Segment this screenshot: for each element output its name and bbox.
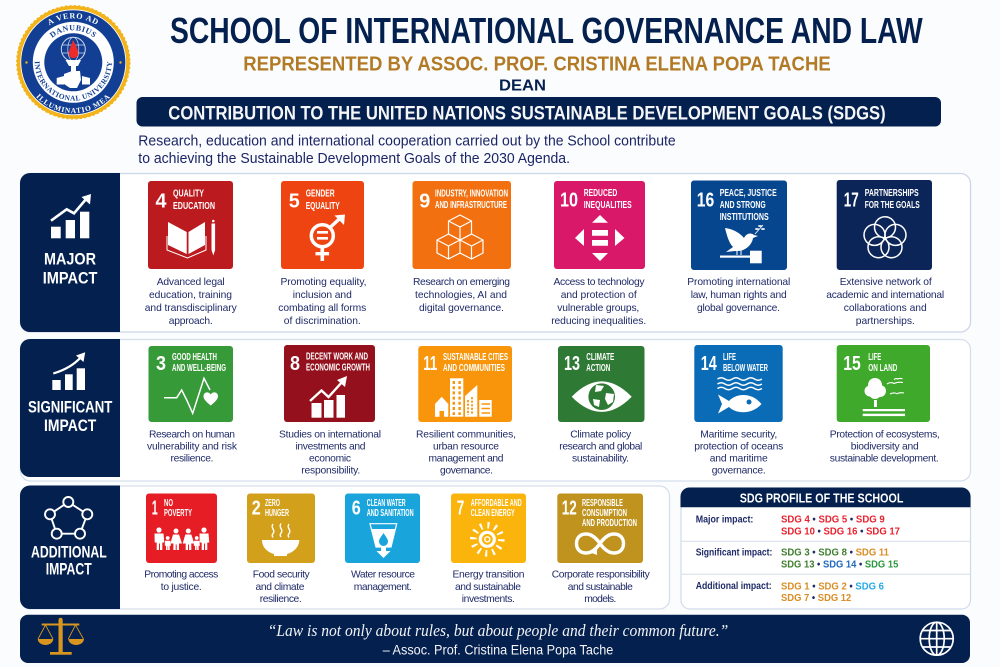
tile: SDG 16 peace justice: INSTITUTIONS [720,212,769,223]
tile: SDG 16 peace justice: PEACE, JUSTICE [720,188,777,199]
description: SDG 5: combating all forms [278,303,366,314]
description: SDG 15 [830,429,940,465]
description: SDG 5: inclusion and [293,290,352,301]
tile: SDG 5 gender equality: 5 [289,190,300,212]
tile: SDG 3 good health [148,346,233,422]
tile: SDG 12 responsible consumption: CONSUMPTION [582,508,627,519]
tile: SDG 15 life on land [837,345,930,422]
tile: SDG 1 no poverty: 1 [152,498,158,520]
row: major impact: SDG 10 • SDG 16 • SDG 17 [781,526,900,538]
tile: SDG 14 life below water: BELOW WATER [723,363,768,374]
tile: SDG 2 zero hunger [247,494,315,563]
tile: SDG 8 decent work: DECENT WORK AND [306,351,368,362]
tile: SDG 9 industry [412,181,511,269]
subtitle: representative: REPRESENTED BY ASSOC. PROF. CRISTINA ELENA POPA TACHE [243,53,831,75]
tile: SDG 12 responsible consumption: AND PRODUCTION [582,518,637,529]
tile: SDG 17 partnerships: 17 [844,190,859,212]
tile: SDG 16 peace justice: AND STRONG [720,200,766,211]
icon: growth chart [310,376,347,418]
row: significant impact: SDG 13 • SDG 14 • SDG 15 [781,559,898,571]
row: major impact: SDG 4 • SDG 5 • SDG 9 [781,514,885,526]
description: SDG 12 [552,570,651,605]
tile: SDG 6 clean water: 6 [352,498,361,520]
description: SDG 11: Resilient communities, [416,429,516,440]
description: SDG 4: education, training [149,290,232,301]
row: additional impact: Additional impact: [696,580,772,592]
description: SDG 15: Protection of ecosystems, [830,429,940,440]
description: SDG 2 [253,570,311,605]
logo: Danubius International University seal: ILLUMINATIO MEA [36,94,110,114]
description: SDG 2: resilience. [260,594,302,605]
description: SDG 15: sustainable development. [830,454,939,465]
tile: SDG 5 gender equality: EQUALITY [306,201,340,212]
tile: SDG 14 life below water: LIFE [723,352,736,363]
tile: SDG 15 life on land: ON LAND [868,363,897,374]
icon: infinity loop [576,534,624,555]
footer quote band [20,615,970,663]
tile: SDG 2 zero hunger: 2 [252,498,261,520]
row: additional impact [696,580,884,604]
icon: scales of justice [38,618,84,655]
icon: family [154,527,209,550]
icon: book and pencil [167,220,215,258]
icon: sun power [473,525,501,553]
label: additional impact: ADDITIONAL [31,543,107,562]
subtitle: dean: DEAN [499,78,546,95]
row: additional impact: SDG 7 • SDG 12 [781,592,851,604]
description: SDG 8: Studies on international [279,429,381,440]
tile: SDG 7 clean energy: AFFORDABLE AND [471,498,522,509]
tile: SDG 11 sustainable cities: 11 [423,353,437,375]
description: SDG 5: of discrimination. [284,316,361,327]
description: SDG 7: and sustainable [455,582,521,593]
icon: steaming bowl [262,524,299,556]
icon: waves and fish [718,378,762,414]
description: SDG 4: approach. [169,316,213,327]
label: major impact: MAJOR [44,249,96,268]
label: additional impact [31,543,107,579]
logo: Danubius International University seal: A VERO AD [48,13,98,26]
tile: SDG 5 gender equality [281,181,364,269]
logo: Danubius International University seal: INTERNATIONAL UNIVERSITY [34,61,112,101]
tile: SDG 11 sustainable cities: AND COMMUNITIES [443,363,505,374]
label: additional impact: IMPACT [46,560,92,579]
intro text [138,134,676,167]
banner heading [136,97,941,126]
tile: SDG 4 quality education [148,181,233,269]
quote: “Law is not only about rules, but about people and their common future.” [268,621,728,640]
tile: SDG 9 industry: INDUSTRY, INNOVATION [435,188,508,200]
tile: SDG 9 industry: AND INFRASTRUCTURE [435,200,507,211]
description: SDG 6 [351,570,415,593]
tile: SDG 8 decent work: ECONOMIC GROWTH [306,363,370,374]
description: SDG 13: research and global [559,442,642,452]
panel: SDG profile of the school [680,488,970,609]
tile: SDG 4 quality education: 4 [156,190,167,212]
description: SDG 16: law, human rights and [691,290,787,301]
tile: SDG 8 decent work [284,345,375,422]
description: SDG 9: digital governance. [419,303,504,314]
description: SDG 1 [144,570,218,593]
tile: SDG 7 clean energy: CLEAN ENERGY [471,508,515,519]
icon: growth bars [52,352,85,390]
tile: SDG 6 clean water: AND SANITATION [367,508,414,519]
tile: SDG 9 industry: 9 [419,190,430,212]
tile: SDG 7 clean energy [451,494,526,563]
description: SDG 14: protection of oceans [694,442,783,452]
icon: network pentagon [45,497,92,539]
description: SDG 8: economic [309,454,351,465]
label: significant impact: SIGNIFICANT [28,397,113,416]
tile: SDG 10 reduced inequalities: REDUCED [584,188,617,199]
description: SDG 3: vulnerability and risk [147,442,238,452]
description: SDG 14: Maritime security, [700,429,777,440]
tile: SDG 1 no poverty: NO [164,498,173,509]
description: SDG 8 [279,429,381,477]
tile: SDG 3 good health: GOOD HEALTH [172,352,217,363]
description: SDG 3 [147,429,238,465]
description: SDG 17 [826,277,944,327]
icon: glass with drop [370,524,397,558]
tile: SDG 11 sustainable cities [418,346,512,422]
description: SDG 4: and transdisciplinary [145,303,238,314]
tile: SDG 13 climate action: CLIMATE [586,352,615,363]
tile: SDG 13 climate action [558,346,644,422]
description: SDG 11 [416,429,516,477]
tile: SDG 13 climate action: 13 [564,353,580,375]
tile: SDG 16 peace justice: 16 [697,190,714,212]
description: SDG 16: global governance. [697,303,780,314]
description: SDG 17: academic and international [826,290,944,301]
icon: five rings [864,217,906,258]
tile: SDG 10 reduced inequalities [554,181,645,269]
row: significant impact [696,546,898,571]
description: SDG 2: and climate [256,582,305,593]
logo: Danubius International University seal: DANUBIUS [49,25,96,38]
description: SDG 13: sustainability. [572,454,629,465]
label: significant impact [28,397,113,435]
description: SDG 11: governance. [440,466,493,477]
description: SDG 6: Water resource [351,570,415,581]
description: SDG 9 [413,277,510,314]
tile: SDG 3 good health: 3 [156,353,166,375]
description: SDG 6: management. [354,582,412,593]
description: SDG 8: investments and [296,442,366,452]
tile: SDG 14 life below water: 14 [701,353,717,375]
description: SDG 12: models. [584,594,616,605]
tile: SDG 10 reduced inequalities: INEQUALITIES [584,200,632,211]
icon: dove and gavel [720,225,765,263]
description: SDG 15: biodiversity and [851,442,919,452]
description: SDG 13: Climate policy [570,429,632,440]
label: major impact: IMPACT [43,268,98,287]
description: SDG 7: investments. [462,594,515,605]
description: SDG 7: Energy transition [452,570,525,581]
tile: SDG 16 peace justice [691,180,787,270]
description: SDG 7 [452,570,525,605]
description: SDG 16: Promoting international [687,277,790,288]
description: SDG 12: and sustainable [568,582,633,593]
tile: SDG 17 partnerships: FOR THE GOALS [865,200,920,211]
row: additional impact: SDG 1 • SDG 2 • SDG 6 [781,580,884,592]
panel: significant impact [20,339,970,481]
tile: SDG 3 good health: AND WELL-BEING [172,363,226,374]
description: SDG 2: Food security [253,570,311,581]
tile: SDG 15 life on land: LIFE [868,352,881,363]
banner heading: CONTRIBUTION TO THE UNITED NATIONS SUSTAINABLE DEVELOPMENT GOALS (SDGS) [168,104,886,124]
description: SDG 4 [145,277,238,327]
description: SDG 5: Promoting equality, [280,277,366,288]
label: significant impact: IMPACT [44,416,97,435]
description: SDG 16 [687,277,790,314]
row: major impact [696,514,900,538]
tile: SDG 14 life below water [694,345,783,422]
description: SDG 10: Access to technology [554,277,645,288]
description: SDG 11: urban resource [433,442,499,452]
description: SDG 12: Corporate responsibility [552,570,651,581]
description: SDG 8: responsibility. [301,466,360,477]
description: SDG 4: Advanced legal [157,277,225,288]
tile: SDG 13 climate action: ACTION [586,363,610,374]
logo: Danubius International University seal [16,5,130,120]
description: SDG 3: resilience. [170,454,214,465]
tile: SDG 6 clean water: CLEAN WATER [367,498,406,509]
row: major impact: Major impact: [696,514,753,526]
description: SDG 10: and protection of [561,290,637,301]
tile: SDG 6 clean water [345,494,420,563]
tile: SDG 17 partnerships [837,180,932,270]
tile: SDG 5 gender equality: GENDER [306,189,335,200]
row: significant impact: Significant impact: [696,546,772,558]
intro text: to achieving the Sustainable Development Goals of the 2030 Agenda. [138,151,570,167]
attribution: – Assoc. Prof. Cristina Elena Popa Tache [383,643,613,658]
description: SDG 5 [278,277,366,327]
tile: SDG 12 responsible consumption: 12 [562,498,577,520]
description: SDG 10: vulnerable groups, [557,303,639,314]
icon: eye with globe [572,381,632,412]
description: SDG 17: collaborations and [844,303,927,314]
description: SDG 11: management and [428,454,504,465]
icon: arrows and equals [575,215,624,261]
description: SDG 9: technologies, AI and [415,290,507,301]
icon: cubes [437,215,483,259]
tile: SDG 8 decent work: 8 [290,353,300,375]
tile: SDG 1 no poverty [146,494,217,563]
tile: SDG 2 zero hunger: HUNGER [265,508,289,519]
icon: city buildings [435,378,492,417]
tile: SDG 10 reduced inequalities: 10 [560,190,578,212]
description: SDG 14 [694,429,783,477]
description: SDG 9: Research on emerging [413,277,510,288]
icon: rising bar chart [51,194,91,238]
profile heading: SDG PROFILE OF THE SCHOOL [740,492,904,506]
description: SDG 14: and maritime [710,454,768,465]
tile: SDG 1 no poverty: POVERTY [164,508,192,519]
description: SDG 3: Research on human [149,429,235,440]
tile: SDG 17 partnerships: PARTNERSHIPS [865,188,919,199]
description: SDG 10 [551,277,646,327]
description: SDG 10: reducing inequalities. [551,316,646,327]
tile: SDG 4 quality education: QUALITY [173,189,204,200]
description: SDG 17: Extensive network of [840,277,932,288]
tile: SDG 2 zero hunger: ZERO [265,498,280,509]
tile: SDG 12 responsible consumption: RESPONSIBLE [582,498,623,509]
icon: globe [920,622,953,655]
tile: SDG 11 sustainable cities: SUSTAINABLE CITIES [443,352,508,363]
description: SDG 17: partnerships. [856,316,915,327]
icon: gender symbol [311,214,345,261]
tile: SDG 7 clean energy: 7 [457,498,464,520]
description: SDG 1: Promoting access [144,570,218,581]
intro text: Research, education and international cooperation carried out by the School contribute [138,134,676,150]
description: SDG 1: to justice. [161,582,202,593]
tile: SDG 15 life on land: 15 [843,353,861,375]
icon: tree and birds [863,378,905,416]
tile: SDG 4 quality education: EDUCATION [173,201,215,212]
icon: heartbeat [164,378,218,413]
tile: SDG 12 responsible consumption [557,494,643,563]
panel: additional impact [20,486,670,609]
row: significant impact: SDG 3 • SDG 8 • SDG 11 [781,547,889,559]
description: SDG 13 [559,429,642,465]
description: SDG 14: governance. [712,466,766,477]
label: major impact [43,249,98,287]
panel: major impact [20,173,970,332]
